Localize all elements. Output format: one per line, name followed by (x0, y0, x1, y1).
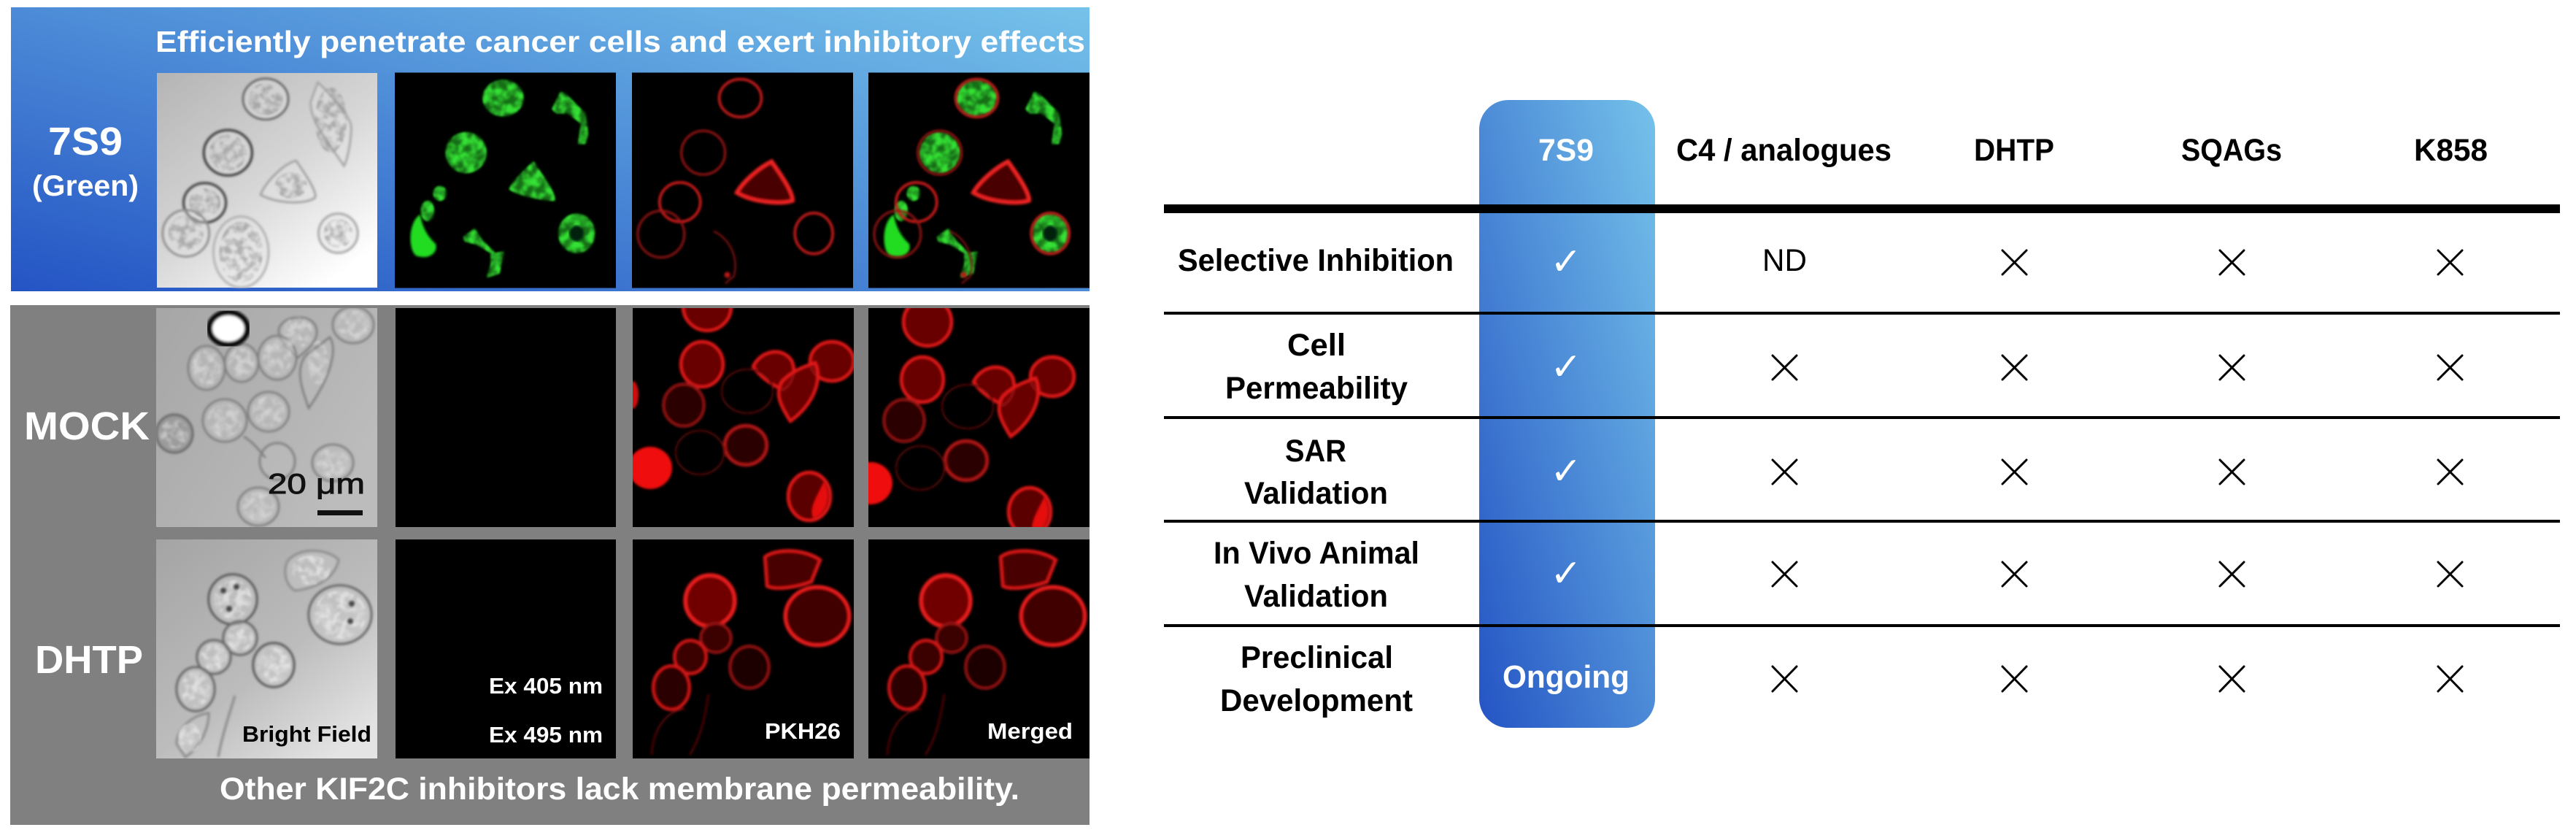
row labels: Cell (1287, 328, 1346, 363)
row label: 7S9: 7S9 (48, 120, 123, 164)
table header: C4 / analogues (1676, 133, 1891, 168)
table header: SQAGs (2181, 133, 2282, 168)
row labels: Validation (1244, 476, 1388, 511)
7S9 column values (1503, 240, 1630, 695)
row labels: In Vivo Animal (1214, 536, 1419, 571)
label: PKH26: PKH26 (765, 718, 841, 744)
K858 column values (2438, 250, 2462, 691)
table header: 7S9 (1538, 133, 1594, 168)
image: mock blue and green channel (396, 308, 616, 527)
table rules (1164, 204, 2560, 627)
7S9 column values: ✓ (1550, 240, 1582, 284)
row label: MOCK: MOCK (24, 404, 150, 448)
DHTP column values (2002, 250, 2027, 691)
image: DHTP red channel (633, 539, 854, 758)
SQAGs column values (2220, 250, 2244, 691)
scale bar (317, 510, 363, 515)
row labels: Selective Inhibition (1178, 243, 1454, 278)
row labels: Validation (1244, 579, 1388, 614)
panel: other inhibitors (10, 283, 1090, 825)
image: mock red channel (633, 308, 854, 527)
label: Bright Field: Bright Field (242, 721, 371, 747)
scale label: 20 μm (268, 469, 365, 500)
label: Merged: Merged (987, 718, 1073, 744)
image: 7S9 red channel (632, 73, 853, 288)
image: DHTP merged (868, 539, 1090, 758)
table header: DHTP (1974, 133, 2054, 168)
row labels (1178, 243, 1454, 718)
label: Ex 405 nm: Ex 405 nm (489, 673, 603, 699)
image: 7S9 bright field (157, 73, 377, 288)
heading: penetration claim: Efficiently penetrate cancer cells and exert inhibitory effects (155, 25, 1085, 58)
caption: lack of permeability: Other KIF2C inhibitors lack membrane permeability. (220, 772, 1019, 807)
row labels: SAR (1285, 434, 1346, 469)
row label: DHTP: DHTP (35, 638, 143, 682)
7S9 column values: ✓ (1550, 450, 1582, 493)
highlight column: 7S9 (1479, 100, 1655, 728)
C4 column values (1762, 243, 1807, 691)
table header (1538, 133, 2488, 168)
label: Ex 495 nm: Ex 495 nm (489, 722, 603, 748)
row labels: Preclinical (1241, 640, 1393, 675)
image: DHTP bright field (156, 539, 377, 758)
image: mock bright field (156, 308, 377, 527)
image: 7S9 green channel (395, 73, 616, 288)
7S9 column values: Ongoing (1503, 659, 1630, 695)
C4 column values: ND (1762, 243, 1807, 278)
panel: 7S9 green (11, 7, 1090, 291)
image: DHTP blue and green channel (396, 539, 616, 758)
panel: comparison table (1164, 100, 2560, 728)
image: 7S9 merged (868, 73, 1090, 288)
row label: Green: (Green) (32, 170, 139, 202)
row labels: Permeability (1225, 371, 1408, 406)
7S9 column values: ✓ (1550, 552, 1582, 596)
7S9 column values: ✓ (1550, 345, 1582, 389)
image: mock merged (868, 308, 1090, 527)
row labels: Development (1220, 683, 1413, 718)
table header: K858 (2414, 133, 2488, 168)
